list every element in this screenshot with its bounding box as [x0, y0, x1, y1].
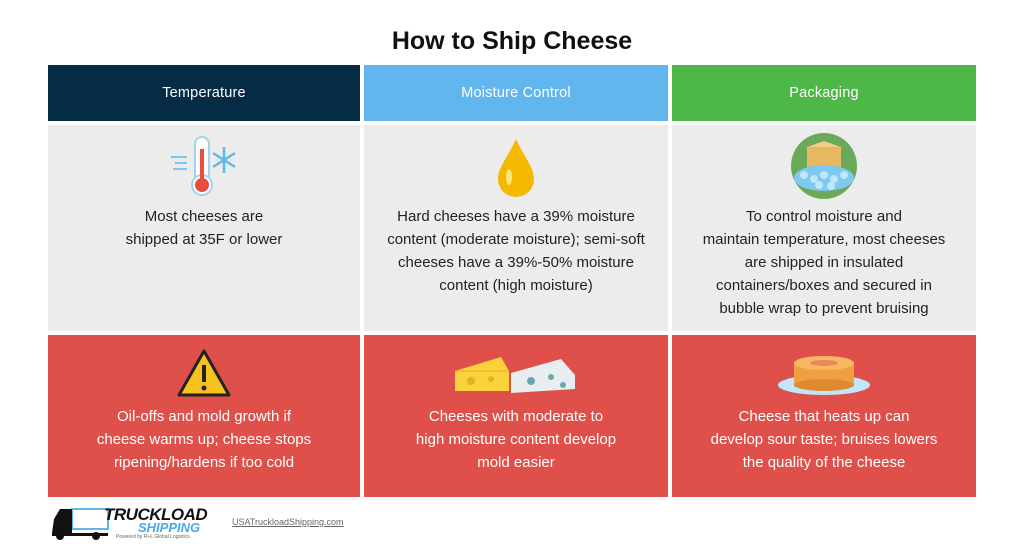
header: packaging [672, 65, 976, 121]
icon: box in bubble wrap [791, 133, 857, 199]
panel: temperature risk: ripening/hardens if too cold [114, 454, 294, 471]
icon: thermometer [171, 136, 236, 196]
icon: cheese wheel [778, 356, 870, 395]
panel: packaging risk: the quality of the cheese [743, 454, 905, 471]
header: temperature: Temperature [162, 85, 246, 101]
panel: temperature risk [48, 335, 360, 497]
panel: packaging info [672, 125, 976, 331]
panel: packaging risk: Cheese that heats up can [739, 408, 909, 425]
panel: packaging info: bubble wrap to prevent bruising [719, 300, 929, 317]
panel: moisture info: Hard cheeses have a 39% moisture [397, 208, 635, 225]
panel: moisture risk: Cheeses with moderate to [429, 408, 603, 425]
icon: warning [178, 349, 231, 396]
logo: SHIPPING [138, 520, 200, 535]
icon: cheese wedges [455, 357, 575, 393]
panel: packaging info: containers/boxes and secured in [716, 277, 932, 294]
panel: temperature info: shipped at 35F or lower [126, 231, 282, 248]
panel: moisture risk [364, 335, 668, 497]
panel: packaging risk: develop sour taste; bruises lowers [711, 431, 937, 448]
header: packaging: Packaging [789, 85, 859, 101]
panel: moisture info [364, 125, 668, 331]
panel: moisture info: cheeses have a 39%-50% moisture [398, 254, 634, 271]
header: moisture control [364, 65, 668, 121]
icon: truck [52, 508, 109, 540]
panel: packaging info: To control moisture and [746, 208, 902, 225]
icon: oil drop [498, 139, 534, 197]
website url: USATruckloadShipping.com [232, 517, 344, 527]
header: moisture control: Moisture Control [461, 85, 571, 101]
panel: moisture info: content (moderate moisture); semi-soft [387, 231, 645, 248]
panel: moisture info: content (high moisture) [439, 277, 593, 294]
panel: packaging info: are shipped in insulated [745, 254, 903, 271]
panel: temperature info: Most cheeses are [145, 208, 263, 225]
panel: temperature info [48, 125, 360, 331]
header: temperature [48, 65, 360, 121]
panel: packaging risk [672, 335, 976, 497]
title: How to Ship Cheese [392, 27, 632, 55]
panel: moisture risk: high moisture content develop [416, 431, 616, 448]
logo: TRUCKLOAD [104, 505, 207, 524]
panel: moisture risk: mold easier [477, 454, 555, 471]
logo [52, 505, 208, 540]
logo: Powered by R+L Global Logistics [116, 534, 190, 540]
panel: packaging info: maintain temperature, most cheeses [703, 231, 945, 248]
panel: temperature risk: cheese warms up; cheese stops [97, 431, 311, 448]
panel: temperature risk: Oil-offs and mold growth if [117, 408, 291, 425]
